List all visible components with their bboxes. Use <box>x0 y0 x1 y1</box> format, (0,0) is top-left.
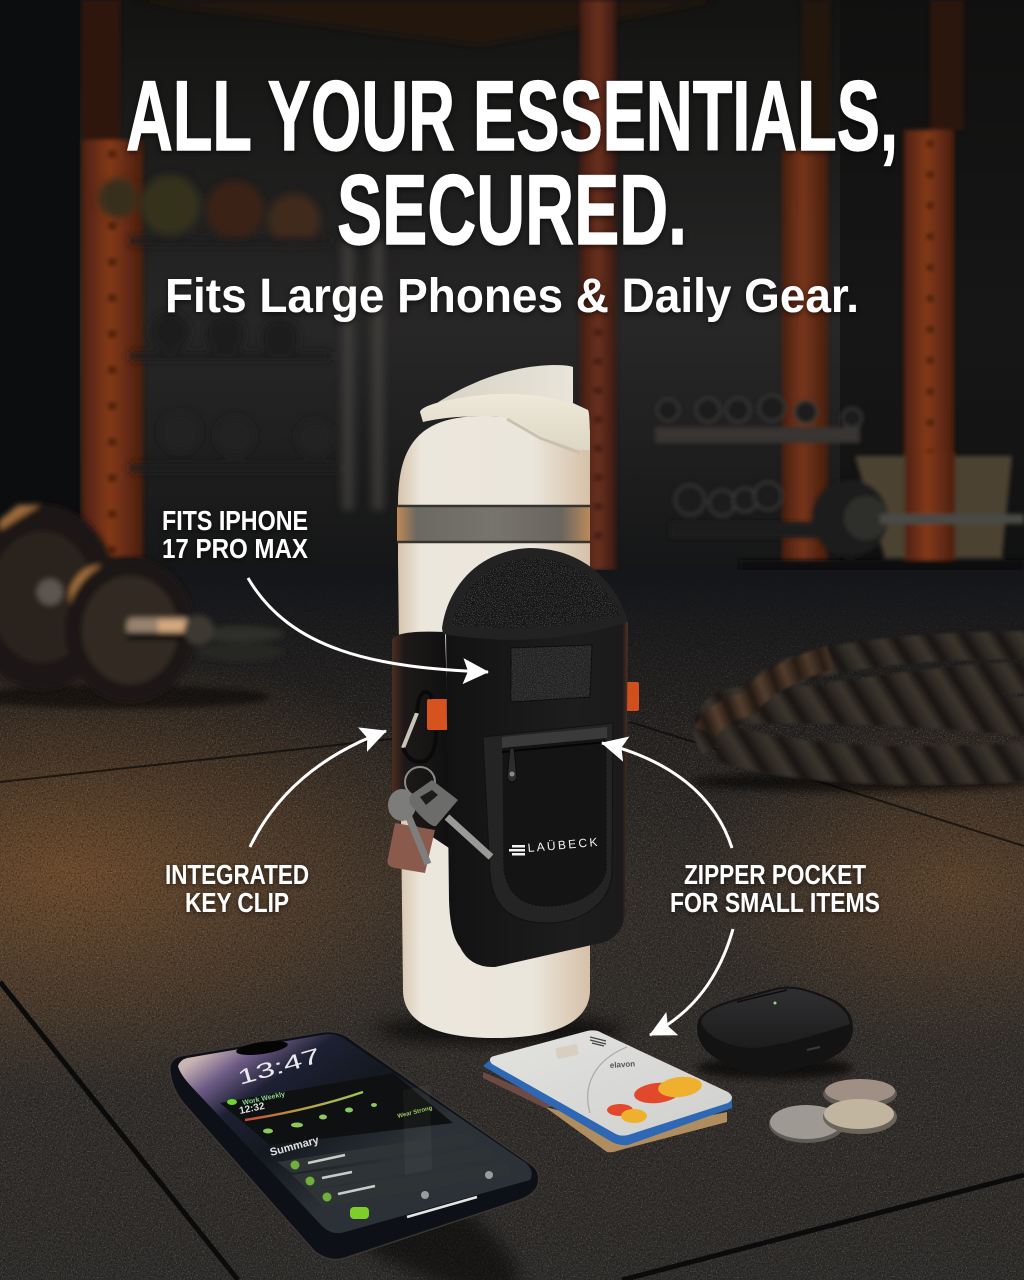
carabiner and keys <box>387 692 491 873</box>
smartphone <box>170 1032 540 1280</box>
arrow: small items <box>650 929 733 1035</box>
airpods case <box>697 987 853 1079</box>
water bottle <box>375 365 625 1044</box>
maroon card edge <box>483 1072 560 1108</box>
label: key clip: KEY CLIP <box>185 887 289 918</box>
label: key clip <box>165 859 309 918</box>
brand logo: LAÜBECK <box>527 835 598 855</box>
bottle band <box>397 505 590 542</box>
dumbbell <box>0 504 284 709</box>
orange tabs <box>427 682 639 730</box>
label: zipper pocket: ZIPPER POCKET <box>684 859 866 890</box>
bottle body <box>398 416 590 1038</box>
rear strap <box>392 632 452 850</box>
bottle shadow <box>375 1016 625 1044</box>
velcro strip <box>510 644 592 702</box>
tan card <box>545 1107 727 1152</box>
label: zipper pocket <box>670 859 880 918</box>
phone screen content: 13:47 <box>235 1044 323 1090</box>
kettlebell rack <box>655 395 1024 580</box>
pouch body <box>446 622 628 967</box>
arrow: zipper pocket <box>602 743 732 848</box>
velcro flap <box>442 548 630 640</box>
right strap edge <box>610 625 628 800</box>
label: zipper pocket: FOR SMALL ITEMS <box>670 887 880 918</box>
rubber floor <box>0 570 1024 1280</box>
phone screen content: Wear Strong <box>397 1105 433 1120</box>
bottle lid <box>420 365 590 453</box>
arrow: key clip <box>250 731 386 847</box>
phone screen content: Work Weekly <box>242 1091 286 1107</box>
arrow: fits iphone <box>248 578 488 672</box>
zipper pocket <box>483 723 613 923</box>
subtitle: Fits Large Phones & Daily Gear. <box>165 270 859 323</box>
battle rope <box>690 645 1024 792</box>
sleeve pouch <box>387 548 639 967</box>
phone screen content: Summary <box>269 1134 321 1159</box>
label: key clip: INTEGRATED <box>165 859 309 890</box>
title line two: SECURED. <box>337 154 687 265</box>
blue card <box>483 1060 732 1145</box>
gym background <box>0 0 1024 634</box>
rack uprights <box>82 0 985 634</box>
phone screen content <box>220 1044 511 1219</box>
coins <box>769 1079 897 1143</box>
phone screen content: 12:32 <box>238 1101 266 1117</box>
label: fits iphone: 17 PRO MAX <box>162 533 308 564</box>
top card <box>490 1030 732 1136</box>
credit cards <box>483 1030 732 1152</box>
credit cards: elavon <box>610 1059 636 1070</box>
shelf with medicine balls <box>98 175 384 510</box>
label: fits iphone: FITS IPHONE <box>162 505 308 536</box>
label: fits iphone <box>162 505 308 564</box>
